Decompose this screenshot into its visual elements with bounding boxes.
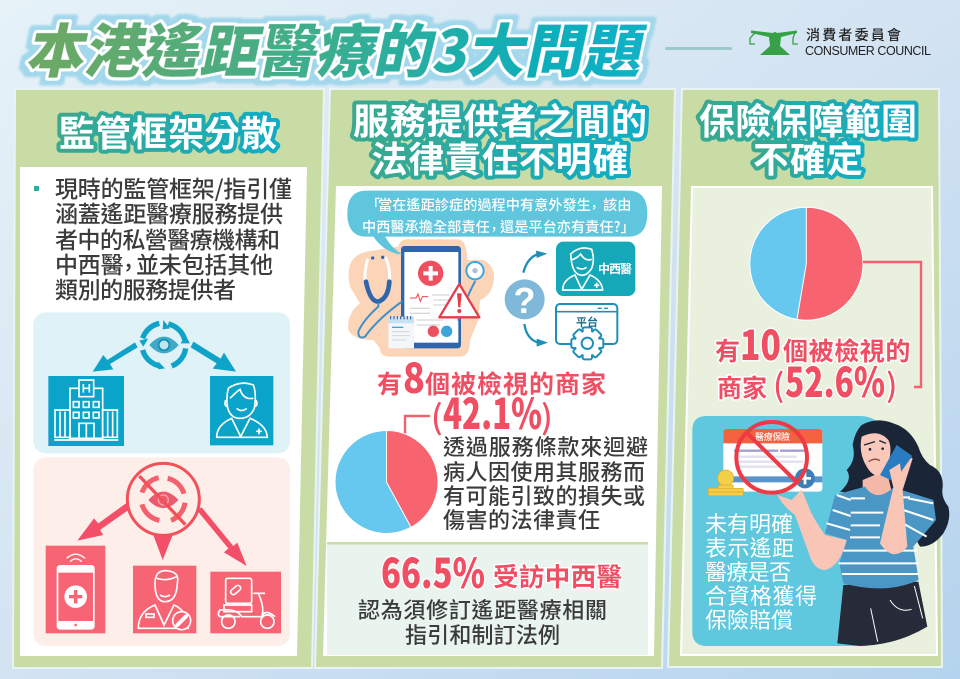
logo text english: CONSUMER COUNCIL xyxy=(805,44,931,58)
statistic: 10 merchants xyxy=(715,312,911,372)
arrow right xyxy=(191,342,236,372)
caption text: 表示遙距 xyxy=(705,531,794,563)
label: doctors surveyed: 受訪中西醫 xyxy=(493,557,622,594)
question circle xyxy=(505,279,545,319)
panel frame xyxy=(668,89,942,667)
body text: 類別的服務提供者 xyxy=(55,271,236,305)
statistic: 52.6 percent: 商家 xyxy=(717,369,767,405)
inner card xyxy=(681,187,937,655)
caption text: 未有明確 xyxy=(705,507,793,539)
description text: 傷害的法律責任 xyxy=(443,503,600,535)
icon: hospital xyxy=(48,376,124,446)
heading: 監管框架分散 xyxy=(59,105,277,157)
body text: 並未包括其他 xyxy=(136,246,273,280)
statistic: 52.6 percent: ) xyxy=(886,361,897,407)
description text: 病人因使用其服務而 xyxy=(443,455,645,487)
prohibition sign xyxy=(736,422,807,493)
quote text: 該由 xyxy=(603,195,631,215)
connector xyxy=(863,262,921,387)
teal card xyxy=(692,416,887,646)
body text: , xyxy=(125,240,132,274)
quote text: 還是平台亦有責任?」 xyxy=(500,217,635,237)
icon: delivery scooter xyxy=(210,572,281,633)
tablet xyxy=(401,246,461,348)
stethoscope xyxy=(358,256,484,338)
caption text: 保險賠償 xyxy=(705,603,793,635)
quote text: 「 xyxy=(366,195,380,215)
description text xyxy=(443,430,648,535)
statistic: 8 merchants: 有 xyxy=(377,365,402,401)
quote text xyxy=(362,192,635,237)
statistic: 66.5 percent: 66.5% xyxy=(381,540,485,600)
statistic: 42.1 percent: ( xyxy=(431,391,443,439)
label: platform: 平台 xyxy=(576,314,598,330)
callout box: 指引和制訂法例 xyxy=(405,618,560,650)
heading line 1: 服務提供者之間的 xyxy=(353,93,647,145)
statistic: 8 merchants: 個被檢視的商家 xyxy=(425,365,607,401)
icon: eye with cycle xyxy=(139,320,190,369)
panel frame xyxy=(13,89,324,668)
notepad xyxy=(388,316,414,348)
pie chart: 52.6 percent xyxy=(750,207,863,320)
white card xyxy=(323,186,662,656)
statistic: 42.1 percent: 42.1% xyxy=(443,381,542,442)
illustration: telehealth xyxy=(347,191,647,359)
pie chart: 42.1 percent xyxy=(335,430,438,534)
statistic: 8 merchants xyxy=(377,345,607,405)
body text: 者中的私營醫療機構和 xyxy=(55,221,280,255)
title rule xyxy=(665,47,732,50)
heading line 1: 保險保障範圍 xyxy=(699,93,917,145)
caption text: 合資格獲得 xyxy=(705,579,817,611)
statistic: 42.1 percent: ) xyxy=(541,391,553,439)
caption text xyxy=(705,507,817,635)
quote text: 中西醫承擔全部責任 xyxy=(362,217,490,237)
speech bubble xyxy=(347,191,647,255)
diagram: unregulated providers xyxy=(33,457,290,646)
title: 本港遙距醫療的3大問題 xyxy=(21,5,654,89)
callout text: 認為須修訂遙距醫療相關 xyxy=(358,593,607,625)
illustration: insurance and woman xyxy=(692,416,949,646)
heading line 2: 法律責任不明確 xyxy=(372,131,628,183)
statistic: 52.6 percent xyxy=(717,349,897,409)
quote text: 當在遙距診症的過程中有意外發生 xyxy=(378,195,591,215)
arrow to scooter xyxy=(197,507,247,566)
body text: 中西醫 xyxy=(55,246,124,280)
arrow to doctor xyxy=(153,535,173,560)
woman xyxy=(777,420,949,646)
white card xyxy=(20,167,307,656)
panel: insurance coverage xyxy=(668,89,949,667)
statistic: 10 merchants: 個被檢視的 xyxy=(783,332,911,368)
statistic: 52.6 percent: 52.6% xyxy=(785,349,885,409)
statistic: 10 merchants: 有 xyxy=(715,332,740,368)
heading line 2: 不確定 xyxy=(753,131,863,183)
panel frame xyxy=(315,89,675,668)
panel: legal liability xyxy=(315,89,675,668)
connector xyxy=(405,416,430,435)
coins xyxy=(708,470,743,496)
quote text: , xyxy=(592,192,596,212)
label: question mark: ? xyxy=(514,280,536,321)
arrow left xyxy=(93,342,138,372)
arrows to both parties xyxy=(523,251,548,347)
icon: phone xyxy=(46,546,105,633)
body text xyxy=(55,170,292,305)
panel: regulatory framework xyxy=(13,89,324,668)
caption text: 醫療是否 xyxy=(705,555,791,587)
icon: crossed eye xyxy=(127,463,199,535)
icon: doctor xyxy=(210,376,273,445)
statistic: 52.6 percent: ( xyxy=(773,361,784,407)
box: doctor xyxy=(556,242,635,296)
quote text: , xyxy=(492,214,496,234)
callout box xyxy=(327,540,648,655)
body text: 涵蓋遙距醫療服務提供 xyxy=(55,195,283,229)
arrow to phone xyxy=(77,502,131,541)
bullet xyxy=(34,186,39,191)
icon: scales xyxy=(750,30,798,55)
description text: 透過服務條款來迴避 xyxy=(443,430,648,462)
logo: consumer council xyxy=(750,25,931,58)
diagram: regulated providers xyxy=(33,312,290,453)
card title: 醫療保險 xyxy=(755,430,790,443)
body text: 現時的監管框架/指引僅 xyxy=(55,170,292,204)
peach blob xyxy=(348,239,494,357)
statistic: 8 merchants: 8 xyxy=(403,345,425,405)
statistic: 10 merchants: 10 xyxy=(740,312,781,372)
box: platform xyxy=(556,304,617,359)
logo text chinese: 消費者委員會 xyxy=(806,25,901,45)
warning triangle xyxy=(439,284,479,317)
insurance card xyxy=(723,429,822,492)
description text: 有可能引致的損失或 xyxy=(443,479,645,511)
icon: pharmacist xyxy=(133,566,196,633)
label: doctor: 中西醫 xyxy=(598,260,632,277)
